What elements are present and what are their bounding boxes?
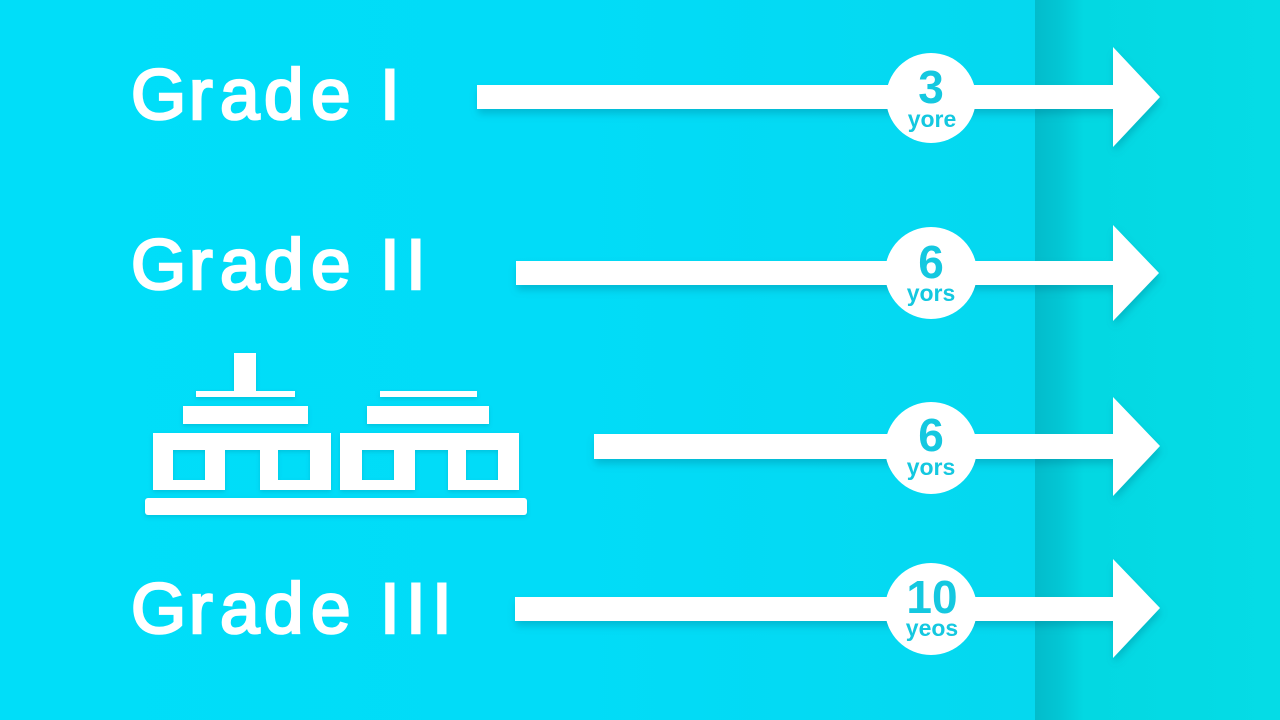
badge: 6 years: yors: [907, 454, 955, 480]
heading: Grade III: Grade III: [131, 570, 452, 649]
arrow: Grade II duration: [516, 225, 1159, 321]
badge: 6 years: yors: [907, 280, 955, 306]
badge: 6 years: 6: [918, 409, 944, 461]
badge: 10 years: 10: [906, 571, 958, 623]
badge: 3 years: 3: [918, 61, 944, 113]
badge: 6 years: [885, 227, 977, 319]
badge: 10 years: yeos: [906, 615, 958, 641]
badge: 6 years: [885, 402, 977, 494]
heading: Grade I: Grade I: [131, 56, 400, 135]
badge: 10 years: [885, 563, 977, 655]
badge: 3 years: [886, 53, 976, 143]
badge: 6 years: 6: [918, 236, 944, 288]
arrow: Grade I duration: [477, 47, 1160, 147]
badge: 3 years: yore: [908, 106, 956, 132]
arrow: building duration: [594, 397, 1160, 496]
right darker panel: [1035, 0, 1280, 720]
icon: twin buildings: [145, 353, 527, 515]
arrow: Grade III duration: [515, 559, 1160, 658]
heading: Grade II: Grade II: [131, 226, 426, 305]
